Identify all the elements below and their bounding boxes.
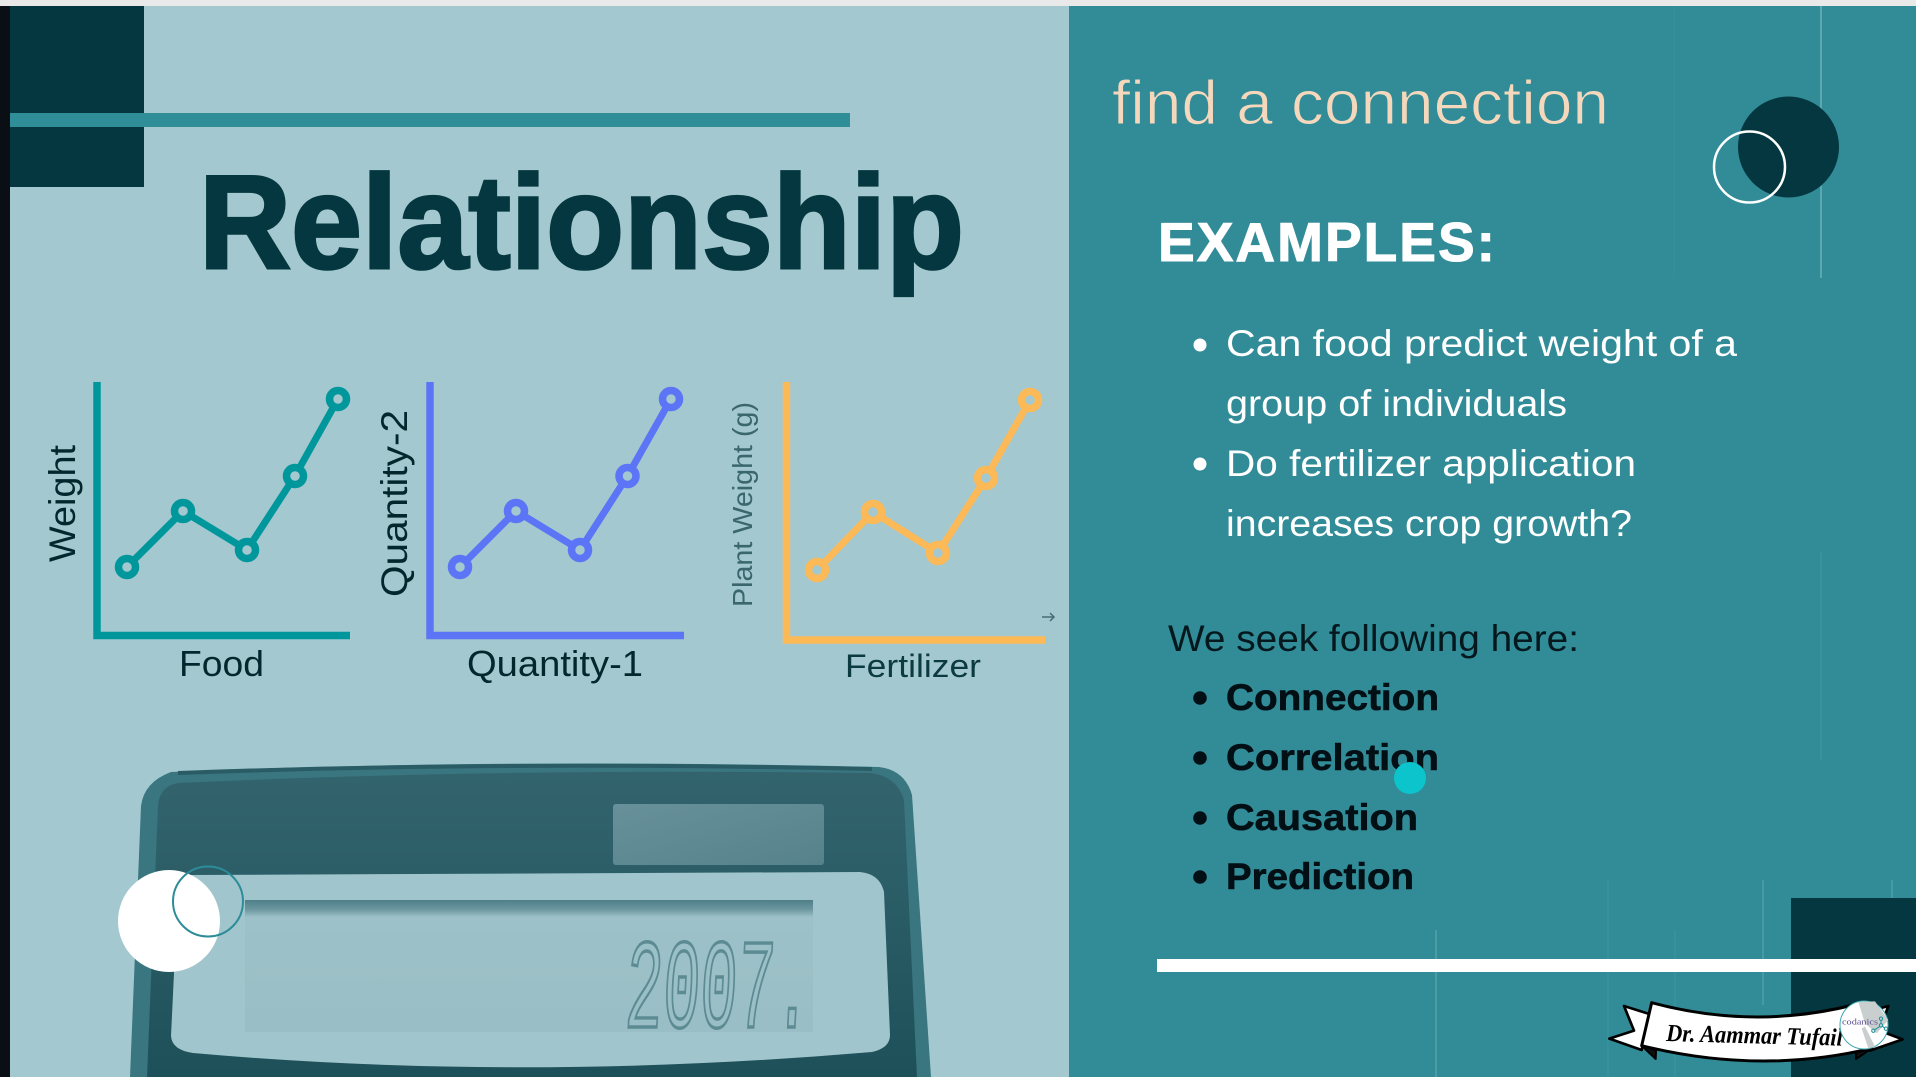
heading: examples: EXAMPLES: <box>1158 211 1495 273</box>
decorative vertical lines <box>1436 6 1892 1077</box>
chart: plant weight vs fertilizer: Plant Weight (g) <box>727 402 758 607</box>
decorative dark square bottom-right <box>1791 898 1916 1077</box>
chart: plant weight vs fertilizer <box>727 382 1045 684</box>
examples list: increases crop growth? <box>1226 503 1632 544</box>
list: connection, correlation, causation, prediction: Connection <box>1226 677 1439 718</box>
pointer dot <box>1394 762 1426 794</box>
chart: quantity-2 vs quantity-1: Quantity-2 <box>374 410 415 597</box>
list: connection, correlation, causation, prediction: Prediction <box>1226 856 1414 897</box>
examples list: Do fertilizer application <box>1226 443 1636 484</box>
logo: codanics <box>1840 1001 1888 1049</box>
logo: codanics: codanics <box>1842 1017 1879 1027</box>
calculator illustration: 2007. <box>622 921 816 1066</box>
chart: weight vs food <box>42 382 350 684</box>
panel: left background <box>10 6 1069 1077</box>
chart: plant weight vs fertilizer: Fertilizer <box>845 648 981 684</box>
decorative teal bar <box>10 113 850 127</box>
icon: cursor arrow <box>1042 613 1054 621</box>
panel: right background <box>1069 6 1916 1077</box>
decorative ring <box>173 866 243 936</box>
banner signature: Dr. Aammar Tufail <box>1665 1020 1843 1052</box>
list: connection, correlation, causation, prediction: Causation <box>1226 797 1418 838</box>
title: Relationship <box>199 149 964 297</box>
calculator illustration <box>130 763 931 1077</box>
window left edge <box>0 6 10 1077</box>
heading: find a connection: find a connection <box>1112 69 1609 138</box>
examples list: group of individuals <box>1226 383 1567 424</box>
decorative dark square top-left <box>10 6 144 187</box>
icon: white ring <box>1714 132 1785 202</box>
text: we seek following here: We seek following here: <box>1168 618 1579 659</box>
window top strip <box>0 0 1916 6</box>
banner: Dr. Aammar Tufail <box>1609 1001 1903 1061</box>
examples list: Can food predict weight of a <box>1226 323 1737 364</box>
list: connection, correlation, causation, prediction <box>1194 677 1439 897</box>
decorative white bar <box>1157 959 1916 972</box>
examples list <box>1194 323 1737 544</box>
icon: dark circle <box>1738 96 1839 198</box>
chart: weight vs food: Weight <box>42 444 83 562</box>
list: connection, correlation, causation, prediction: Correlation <box>1226 737 1439 778</box>
chart: quantity-2 vs quantity-1 <box>374 382 684 684</box>
decorative white circle <box>118 870 220 972</box>
chart: weight vs food: Food <box>179 643 264 684</box>
chart: quantity-2 vs quantity-1: Quantity-1 <box>467 643 643 684</box>
